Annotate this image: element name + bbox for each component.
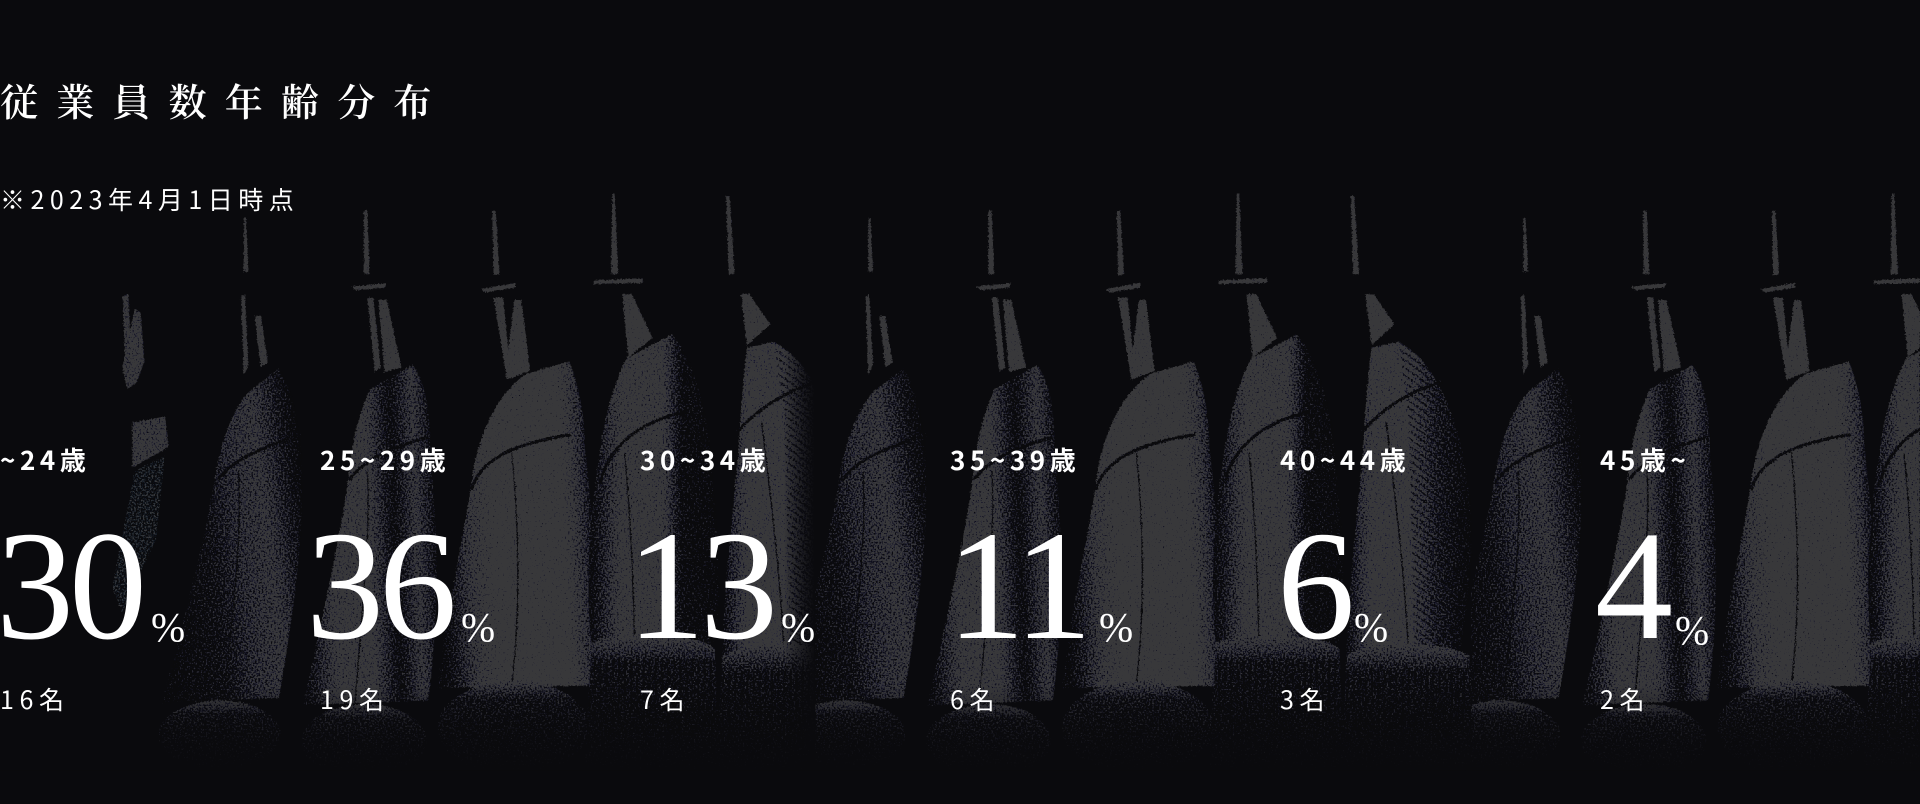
background: hanging jackets photo — [112, 193, 1920, 756]
headcount: 3名 — [1280, 681, 1330, 717]
age label: 40~44歳 — [1280, 441, 1410, 478]
headcount: 16名 — [0, 681, 70, 717]
headcount: 19名 — [320, 681, 390, 717]
age group: 35 to 39 — [947, 441, 1133, 717]
percentage value: 6 — [1277, 499, 1350, 672]
jacket group: right tile — [1439, 193, 1920, 778]
percent sign: % — [151, 604, 185, 650]
percentage value: 13 — [627, 499, 773, 672]
age label: 35~39歳 — [950, 441, 1080, 478]
age label: 45歳~ — [1600, 441, 1690, 478]
headcount: 6名 — [950, 681, 1000, 717]
age label: 25~29歳 — [320, 441, 450, 478]
percent sign: % — [461, 604, 495, 650]
age group: 40 to 44 — [1277, 441, 1410, 717]
percent sign: % — [1099, 604, 1133, 650]
percent sign: % — [1675, 607, 1709, 653]
headcount: 2名 — [1600, 681, 1650, 717]
jacket group: left tile — [113, 193, 857, 778]
percent sign: % — [1354, 604, 1388, 650]
title: 従業員数年齢分布 — [0, 83, 450, 125]
percentage value: 11 — [947, 499, 1087, 672]
age group: under 24 — [0, 441, 185, 717]
age group: 45 and over — [1595, 441, 1709, 717]
percentage value: 30 — [0, 499, 142, 672]
subtitle: date note: ※2023年4月1日時点 — [0, 181, 299, 217]
age group: 30 to 34 — [627, 441, 815, 717]
headcount: 7名 — [640, 681, 690, 717]
age label: ~24歳 — [0, 441, 90, 478]
age group: 25 to 29 — [306, 441, 495, 717]
percentage value: 4 — [1595, 499, 1668, 672]
jacket group: middle tile — [784, 193, 1482, 778]
age label: 30~34歳 — [640, 441, 770, 478]
percent sign: % — [781, 604, 815, 650]
percentage value: 36 — [306, 499, 452, 672]
